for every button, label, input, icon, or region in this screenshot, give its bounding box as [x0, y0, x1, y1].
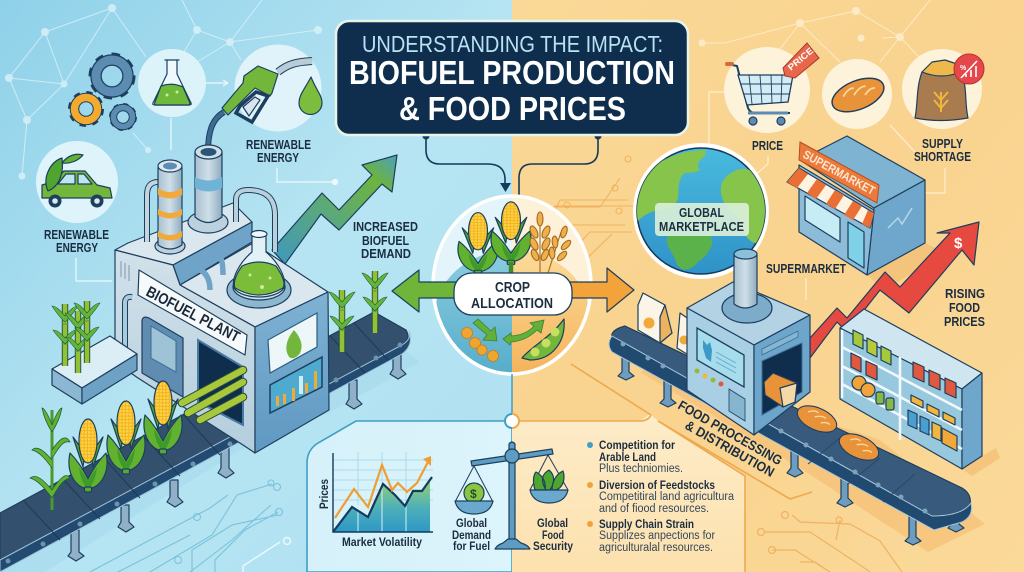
circuit traces: bottom left: [90, 480, 290, 572]
belt side: [0, 331, 410, 572]
crop: swap arrow down: [473, 319, 497, 341]
label: global food security: [533, 518, 574, 553]
store: awning: [787, 168, 874, 228]
arrow: rising biofuel demand: [272, 155, 397, 264]
store: window: [805, 196, 840, 242]
bullet: competition for arable land: Plus techniomies.: [599, 463, 683, 475]
label: price: PRICE: [752, 139, 783, 153]
food bag one: [638, 293, 672, 343]
network lines: food side: [698, 0, 930, 62]
label: supermarket: SUPERMARKET: [766, 262, 846, 276]
belt bolts: [6, 342, 402, 564]
arrow: crops to food: [564, 268, 634, 312]
chart: fuel series: [333, 477, 432, 532]
food machine: [687, 249, 810, 435]
globe: label text: [659, 206, 744, 234]
store: front wall: [799, 165, 874, 275]
machine: buttons: [694, 368, 724, 386]
globe: north america: [634, 150, 706, 225]
store: roof: [800, 136, 925, 208]
icon: shopping cart: [724, 43, 819, 133]
label: rising food prices: PRICES: [944, 315, 985, 329]
label: crop allocation: [454, 273, 572, 315]
shelves: top: [840, 309, 982, 389]
machine: side vent: [762, 331, 798, 355]
store: side wall chart: [888, 208, 912, 228]
plant: roof elbows: [192, 253, 223, 290]
bullet: competition for arable land: Arable Land: [599, 452, 656, 464]
plant: pipe right: [236, 190, 275, 252]
shelves: side: [962, 373, 982, 469]
store: shadow: [867, 243, 945, 290]
crop allocation circle: [430, 195, 594, 375]
crop: pea pod: [522, 319, 564, 360]
plant: door: [198, 340, 243, 425]
conveyor: food: [609, 326, 972, 545]
food belt bolts: [620, 342, 928, 514]
corn ear two: [107, 401, 145, 474]
bullet list: [587, 440, 735, 554]
machine: screen lines: [716, 352, 736, 373]
biofuel plant: [115, 145, 329, 453]
label: rising food prices: [944, 287, 985, 329]
label: increased biofuel demand: DEMAND: [361, 247, 411, 261]
plant: left wall: [115, 250, 255, 453]
scale: right strings: [530, 455, 568, 490]
plant: chimney one: [155, 160, 185, 254]
label: supply shortage: SUPPLY: [922, 137, 964, 151]
store: door: [848, 222, 864, 268]
chart: grid: [333, 452, 433, 532]
title line 1: UNDERSTANDING THE IMPACT:: [362, 31, 663, 57]
chart: price series: [335, 460, 429, 518]
machine: front face: [687, 308, 754, 435]
plant: sign: [138, 270, 247, 355]
arrow: crops to fuel: [392, 270, 462, 312]
ground shadow: right conveyor: [640, 360, 985, 552]
store: side wall: [867, 180, 925, 275]
label: global demand for fuel: Global: [456, 518, 487, 530]
plant: wall pipe inner: [125, 297, 132, 353]
background: food side: [512, 0, 1024, 572]
label: food processing and distribution: & DISTRIBUTION: [683, 418, 777, 480]
shelves: boards: [842, 330, 962, 449]
scale: pole and base: [509, 442, 515, 540]
machine: side face: [754, 315, 810, 435]
scale: hub: [505, 449, 519, 463]
label: renewable energy right: RENEWABLE: [246, 138, 311, 152]
plant: large flask: [227, 230, 291, 308]
store: sign: [799, 142, 879, 203]
label: global food security: Security: [533, 541, 574, 553]
globe: label: [655, 203, 749, 236]
network lines: biofuel side: [5, 0, 322, 180]
bullet: diversion of feedstocks: and of fiood resources.: [599, 503, 709, 515]
globe: label text: GLOBAL: [679, 206, 724, 220]
arrow: dollar sign: $: [954, 235, 963, 252]
label: rising food prices: RISING: [945, 287, 985, 301]
corn stalk: [30, 408, 70, 510]
bullet: diversion of feedstocks: Competitiral land agricultura: [599, 491, 735, 503]
label: global demand for fuel: [452, 518, 491, 553]
label: supply shortage: SHORTAGE: [914, 150, 971, 164]
callout lines: [76, 80, 338, 281]
store: sign text: SUPERMARKET: [801, 147, 878, 198]
title connector: right: [519, 132, 602, 195]
plant: leaf screen: [268, 313, 317, 373]
machine: base ring: [722, 293, 772, 323]
icon: green car: [36, 141, 118, 223]
shelf items: [851, 330, 957, 451]
icon: gears: [70, 56, 135, 129]
bullet: supply chain strain: [587, 519, 715, 554]
plant: pipe left: [147, 182, 158, 242]
label: crop allocation: ALLOCATION: [471, 295, 553, 312]
icon: grain sack: [902, 49, 984, 129]
circle: lower left disc: [434, 250, 512, 375]
circle: upper left: [435, 198, 512, 302]
label: crop allocation: CROP: [495, 279, 530, 296]
belt slats: [23, 323, 388, 540]
plant: chimney two: [188, 145, 228, 233]
chart: x label: Market Volatility: [342, 537, 423, 549]
chart: y label: Prices: [319, 479, 331, 509]
chart: market volatility: [319, 452, 433, 549]
label: supply shortage: [914, 137, 971, 164]
globe: label text: MARKETPLACE: [659, 220, 744, 234]
label: renewable energy right: [246, 138, 311, 165]
supermarket building: [787, 136, 945, 290]
food belt slats: [808, 438, 915, 502]
platform with sugar cane: [52, 301, 137, 404]
divider node: [505, 374, 519, 428]
chart: arrow head: [423, 456, 431, 466]
bullet: supply chain strain: agriculturalal resources.: [599, 542, 713, 554]
machine: screen: [697, 328, 744, 387]
sugar cane stalks: right of plant: [329, 271, 388, 352]
circle ring: [433, 196, 591, 374]
plant: pipe left inner: [147, 182, 158, 242]
crop: corn: [458, 212, 498, 275]
bread loaf block: [764, 373, 797, 407]
panel fill: biofuel half: [307, 421, 512, 572]
icon: globe: [633, 143, 769, 279]
ground shadow: shelves: [962, 448, 1000, 476]
shelves: back: [840, 328, 962, 469]
label: renewable energy left: RENEWABLE: [44, 228, 109, 242]
bullet: competition for arable land: Competition for: [599, 440, 675, 452]
label: renewable energy left: [44, 228, 109, 255]
corn ear one: [69, 419, 107, 492]
label: renewable energy right: ENERGY: [257, 151, 300, 165]
title line 2: BIOFUEL PRODUCTION: [349, 54, 675, 91]
plant: right wall: [255, 292, 329, 453]
plant: window panes: [151, 326, 176, 372]
globe: europe and africa: [721, 169, 768, 243]
plant: wall pipe: [125, 297, 132, 353]
food belt side: [609, 336, 972, 530]
globe: south america: [667, 236, 712, 270]
machine: roof: [687, 282, 810, 345]
background: biofuel side: [0, 0, 512, 572]
label: rising food prices: FOOD: [949, 301, 980, 315]
machine: stack top: [734, 249, 757, 259]
plant: bar screen: [270, 357, 322, 413]
arrow: rising food prices: [810, 222, 979, 358]
grocery shelves: [840, 309, 982, 469]
title connector: left: [422, 132, 511, 192]
sugar cane logs: [182, 370, 243, 420]
crop: stem: [509, 262, 513, 274]
ground shadow: left conveyor: [0, 330, 420, 572]
label: global demand for fuel: Demand: [452, 530, 491, 542]
panel fill: food half: [512, 414, 745, 572]
chart: grid over area: [358, 487, 406, 532]
plant: pipe right inner: [236, 190, 275, 252]
plant: upper block side: [173, 222, 252, 285]
bullet: diversion of feedstocks: Diversion of Feedstocks: [599, 480, 715, 492]
store: awning stripes: [787, 168, 874, 228]
label: increased biofuel demand: BIOFUEL: [362, 234, 409, 248]
scale: right bowl: [530, 490, 568, 503]
circle: upper right: [512, 198, 589, 302]
chart: area: [333, 478, 430, 532]
label: increased biofuel demand: [353, 220, 418, 261]
corn ear three: [144, 381, 182, 454]
bread on belt one: [793, 400, 841, 438]
icon: fuel nozzle: [208, 44, 322, 152]
callout lines: food side: [709, 92, 945, 300]
bullet: supply chain strain: Supply Chain Strain: [599, 519, 694, 531]
bullet: competition for arable land: [587, 440, 683, 475]
scale: beam: [471, 449, 553, 466]
label: renewable energy left: ENERGY: [56, 241, 99, 255]
circuit traces: near globe: [540, 156, 640, 270]
icon: lab flask: [138, 49, 206, 117]
scale: left strings: [455, 466, 493, 502]
machine: grille: [729, 389, 745, 421]
bullet: supply chain strain: Supplizes anpections for: [599, 530, 715, 542]
label: global food security: Food: [542, 530, 564, 542]
icon: down badge: %: [960, 65, 967, 72]
conveyor legs: [68, 352, 406, 561]
circuit traces: bottom right: [758, 512, 902, 572]
chart: axes: [333, 453, 433, 532]
bullet: diversion of feedstocks: [587, 480, 735, 515]
label: food processing and distribution: FOOD PROCESSING: [676, 398, 785, 468]
scale: coin: $: [470, 487, 477, 501]
panel: market trade-offs: [307, 364, 812, 572]
title line 3: & FOOD PRICES: [399, 90, 626, 127]
food belt surface: [612, 326, 970, 518]
plant: upper roof: [115, 203, 252, 265]
scale: leaves: [533, 470, 564, 490]
food bag two: [677, 313, 690, 356]
panel outline: food half: [512, 364, 812, 572]
icon: price tag: PRICE: [786, 46, 815, 73]
plant: lower roof: [180, 243, 328, 327]
circle: lower right disc: [512, 250, 590, 375]
balance scale: [452, 442, 574, 553]
label: increased biofuel demand: INCREASED: [353, 220, 418, 234]
machine: stack: [734, 254, 757, 308]
crop: wheat: [528, 212, 572, 273]
crop: corn tall: [491, 202, 531, 265]
label: global food security: Global: [537, 518, 568, 530]
crop: beans: [462, 328, 498, 362]
food conveyor legs: [618, 350, 964, 545]
icon: bread: [822, 59, 892, 129]
machine: screen glyph: [703, 340, 712, 362]
scale: left bowl: [455, 501, 493, 514]
machine: door: [762, 343, 802, 415]
belt surface: [0, 312, 408, 560]
title box: [336, 21, 688, 135]
plant: sign text: BIOFUEL PLANT: [143, 283, 243, 346]
label: global demand for fuel: for Fuel: [453, 541, 490, 553]
bread on belt two: [835, 428, 883, 466]
scale: foot: [495, 539, 530, 549]
plant: window opening: [142, 317, 183, 397]
crop: swap arrow across: [503, 320, 544, 345]
conveyor: biofuel: [0, 312, 410, 572]
plant: wall vents: [121, 261, 129, 281]
